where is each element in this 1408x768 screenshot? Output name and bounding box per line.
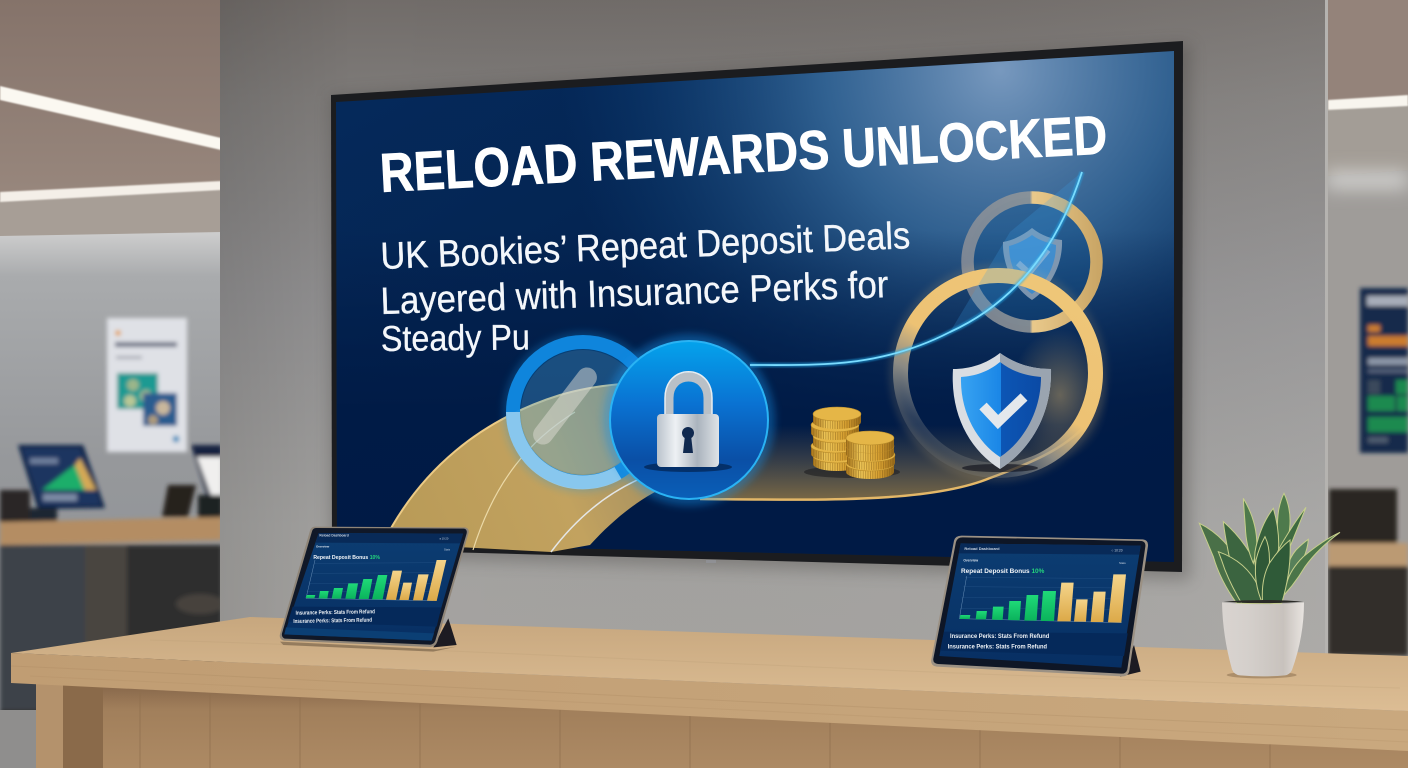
golden ribbon	[383, 329, 1110, 552]
tablet stand	[1120, 645, 1141, 677]
tablet screen	[284, 533, 463, 641]
left tablet	[280, 527, 469, 652]
soft wall glow right	[1326, 172, 1408, 188]
lock disc	[603, 334, 775, 506]
tablet screen	[939, 543, 1141, 668]
tablet bar chart	[306, 560, 446, 601]
tablet header text: Reload Dashboard	[319, 534, 349, 538]
tablet bar chart	[959, 574, 1127, 623]
floor left	[0, 710, 40, 768]
back coin stack	[811, 407, 861, 471]
gold coin stacks	[804, 407, 900, 479]
wall edge trim	[1325, 0, 1328, 660]
right tablet: Overview	[963, 558, 979, 562]
left tablet: ● 10:20	[439, 536, 449, 540]
tablet header text: Reload Dashboard	[964, 546, 1000, 551]
title: RELOAD REWARDS UNLOCKED	[378, 103, 1109, 204]
plant pot	[1222, 602, 1304, 676]
desk front panel	[36, 684, 1408, 768]
right tablet: Stats	[1119, 561, 1126, 565]
large shield	[953, 353, 1051, 472]
tablet shadow and stand	[280, 618, 457, 652]
back desk right	[1328, 543, 1408, 656]
glass ring	[503, 332, 663, 492]
back monitor right	[1329, 489, 1397, 543]
desk top surface	[11, 617, 1408, 711]
tablet insurance text: Insurance Perks: Stats From Refund	[296, 609, 375, 617]
TV logo	[706, 560, 716, 563]
ceiling panel left	[0, 0, 222, 200]
poster left	[107, 318, 187, 452]
back poster right	[1360, 288, 1408, 453]
small shield ring	[968, 198, 1096, 326]
back panel left	[162, 485, 196, 517]
subtitle line 3: Steady Pu	[381, 316, 530, 359]
TV bezel	[331, 41, 1183, 572]
padlock icon	[644, 372, 732, 472]
right tablet: ○ 10:20	[1111, 548, 1123, 552]
glass highlight	[529, 363, 601, 449]
wooden reception desk	[11, 617, 1408, 768]
right tablet	[931, 536, 1148, 677]
blue light streak	[750, 172, 1082, 365]
dark chair left	[0, 490, 30, 524]
tablet body	[280, 527, 469, 647]
ceiling light strips left	[0, 86, 221, 202]
desk leg	[36, 684, 103, 768]
small shield	[1003, 228, 1062, 300]
back room right	[1326, 0, 1408, 768]
tablet chart title: Repeat Deposit Bonus 10%	[313, 555, 380, 561]
tablet insurance text: Insurance Perks: Stats From Refund	[950, 633, 1049, 640]
large shield ring	[893, 268, 1103, 478]
subtitle line 1: UK Bookies’ Repeat Deposit Deals	[380, 215, 911, 278]
TV shadow	[331, 44, 1190, 580]
back desk left	[0, 517, 224, 715]
TV screen	[336, 51, 1174, 562]
back monitor left	[18, 445, 105, 525]
feature wall	[220, 0, 1328, 660]
ceiling panel right	[1326, 0, 1408, 176]
front coin stack	[846, 431, 895, 479]
tablet body	[931, 536, 1148, 676]
back room left	[0, 0, 224, 768]
left tablet: Stats	[444, 548, 451, 552]
right tablet: Insurance Perks: Stats From Refund	[948, 643, 1047, 650]
wall TV	[331, 41, 1183, 572]
plant pot shadow	[1227, 672, 1297, 678]
desk top edge band	[11, 653, 1408, 751]
left tablet: Overview	[316, 544, 330, 548]
potted snake plant	[1199, 493, 1340, 678]
second monitor left	[191, 445, 222, 519]
tablet chart title: Repeat Deposit Bonus 10%	[961, 568, 1044, 575]
subtitle line 2: Layered with Insurance Perks for	[380, 264, 889, 323]
left tablet: Insurance Perks: Stats From Refund	[293, 618, 372, 625]
ceiling light strip right	[1328, 95, 1408, 110]
gold floor fade	[700, 420, 1094, 500]
plant leaves	[1199, 493, 1340, 603]
